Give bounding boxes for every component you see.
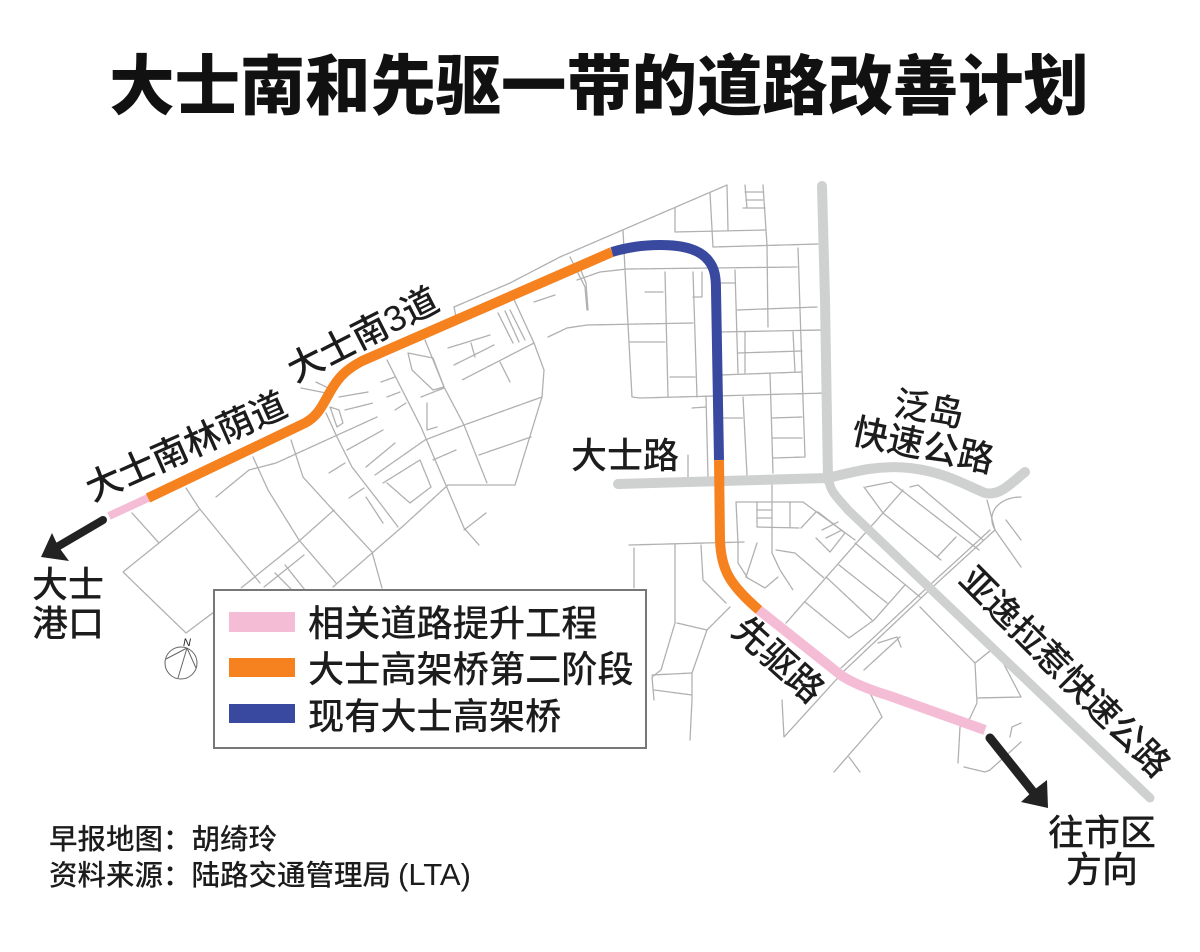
arrow to city — [990, 738, 1048, 808]
label: Tuas port: 港口 — [32, 603, 104, 644]
label: Tuas Road: 大士路 — [571, 435, 679, 476]
legend item: viaduct phase two: 大士高架桥第二阶段 — [308, 649, 634, 690]
title: 大士南和先驱一带的道路改善计划 — [109, 50, 1089, 123]
route segment: orange phase two west — [148, 252, 612, 498]
road: Tuas Road and Penjuru expressway — [618, 467, 1025, 493]
label: Tuas South Avenue 3: 大士南3道 — [280, 279, 445, 390]
compass — [165, 637, 197, 679]
label: Penjuru: 泛岛 — [891, 384, 967, 435]
label: Tuas port: 大士 — [32, 564, 104, 605]
credits — [49, 824, 471, 892]
road: vertical expressway — [822, 186, 828, 480]
route segment: blue existing viaduct — [612, 245, 719, 460]
label: toward city — [1048, 812, 1156, 890]
credits: 早报地图：胡绮玲 — [49, 824, 277, 856]
compass: N — [183, 637, 191, 649]
label: Tuas South Boulevard: 大士南林荫道 — [79, 384, 293, 509]
label: Tuas port — [32, 564, 104, 644]
street network base map — [123, 185, 1021, 772]
expressway roads — [618, 186, 1150, 798]
legend — [214, 590, 646, 748]
route segment: pink west — [109, 498, 148, 516]
route segment: orange phase two south — [719, 460, 759, 610]
legend item: related road upgrades: 相关道路提升工程 — [308, 603, 598, 644]
arrow to Tuas port — [41, 520, 103, 561]
label: Pioneer Road: 先驱路 — [724, 608, 832, 711]
label: Ayer Rajah Expressway: 亚逸拉惹快速公路 — [952, 560, 1177, 785]
label: expressway: 快速公路 — [848, 410, 998, 481]
legend item: existing viaduct: 现有大士高架桥 — [308, 696, 561, 737]
road: Ayer Rajah Expressway — [829, 480, 1150, 798]
route: existing Tuas viaduct and phases — [109, 245, 985, 730]
route segment: pink south — [759, 610, 985, 730]
credits: 资料来源：陆路交通管理局(LTA) — [49, 857, 471, 892]
label: toward city: 往市区 — [1048, 812, 1156, 853]
label: toward city: 方向 — [1066, 849, 1138, 890]
